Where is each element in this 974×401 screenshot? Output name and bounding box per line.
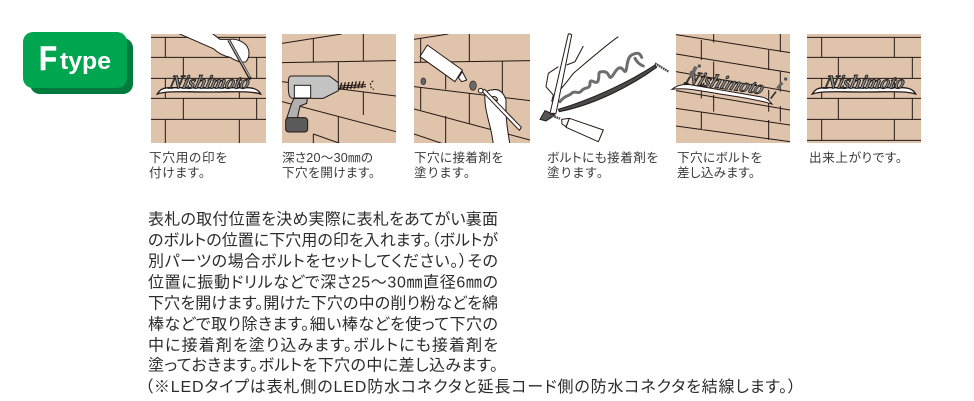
caption: step 4 xyxy=(547,150,658,180)
caption: step 3: 塗ります。 xyxy=(414,166,470,180)
sign: Nishimoto: Nishimoto xyxy=(166,73,252,93)
sign: Nishimoto tilted: Nishimoto xyxy=(681,68,768,99)
icon: adhesive tube xyxy=(420,45,467,82)
caption: step 1: 付けます。 xyxy=(149,166,205,180)
icon: hand with brush xyxy=(546,34,618,113)
caption: step 2 xyxy=(282,151,375,180)
text block: instructions xyxy=(145,210,796,396)
caption: step 4: 塗ります。 xyxy=(547,166,603,180)
panel: step 1 marking the holes xyxy=(151,33,266,143)
caption: step 2: 深さ20～30㎜の xyxy=(282,151,373,165)
sign: Nishimoto: Nishimoto xyxy=(821,73,907,93)
text block: instructions: 棒などで取り除きます。細い棒などを使って下穴の xyxy=(148,316,498,334)
panel: step 2 drilling xyxy=(282,34,396,144)
caption: step 5 xyxy=(677,151,762,180)
text block: instructions: （※LEDタイプは表札側のLED防水コネクタと延長コード側の防水コネクタを結線します。） xyxy=(145,378,796,396)
caption: step 5: 差し込みます。 xyxy=(677,166,755,180)
icon: drill xyxy=(286,76,374,132)
badge: F type: F xyxy=(39,40,57,78)
caption: step 3: 下穴に接着剤を xyxy=(414,150,503,165)
text block: instructions: のボルトの位置に下穴用の印を入れます。（ボルトが xyxy=(148,232,498,250)
icon: hand with pencil xyxy=(178,33,251,79)
caption: step 5: 下穴にボルトを xyxy=(677,151,762,165)
text block: instructions: 別パーツの場合ボルトをセットしてください。）その xyxy=(148,252,498,270)
caption: step 2: 下穴を開けます。 xyxy=(282,166,375,180)
caption: step 3 xyxy=(414,150,503,180)
badge: F type xyxy=(23,32,133,94)
text block: instructions: 位置に振動ドリルなどで深さ25～30㎜直径6㎜の xyxy=(148,274,498,292)
caption: step 1 xyxy=(149,151,227,180)
icon: bolts and holes xyxy=(691,64,787,99)
panel: step 4 adhesive on bolts xyxy=(540,34,669,142)
text block: instructions: 塗っておきます。ボルトを下穴の中に差し込みます。 xyxy=(148,356,498,374)
panel: step 6 finished xyxy=(807,34,921,143)
badge: F type: type xyxy=(60,48,111,75)
caption: step 4: ボルトにも接着剤を xyxy=(547,150,658,165)
text block: instructions: 下穴を開けます。開けた下穴の中の削り粉などを綿 xyxy=(148,294,498,312)
panel: step 5 inserting the sign xyxy=(672,34,790,143)
panel: step 3 applying adhesive xyxy=(414,34,530,145)
text block: instructions: 表札の取付位置を決め実際に表札をあてがい裏面 xyxy=(148,210,498,228)
icon: adhesive tube xyxy=(562,118,603,142)
icon: back of sign xyxy=(540,53,669,121)
icon: hand with brush xyxy=(478,88,521,145)
text block: instructions: 中に接着剤を塗り込みます。ボルトにも接着剤を xyxy=(148,336,498,354)
caption: step 1: 下穴用の印を xyxy=(149,151,227,165)
icon: drilled holes xyxy=(421,78,476,90)
caption: step 6: 出来上がりです。 xyxy=(809,151,902,165)
